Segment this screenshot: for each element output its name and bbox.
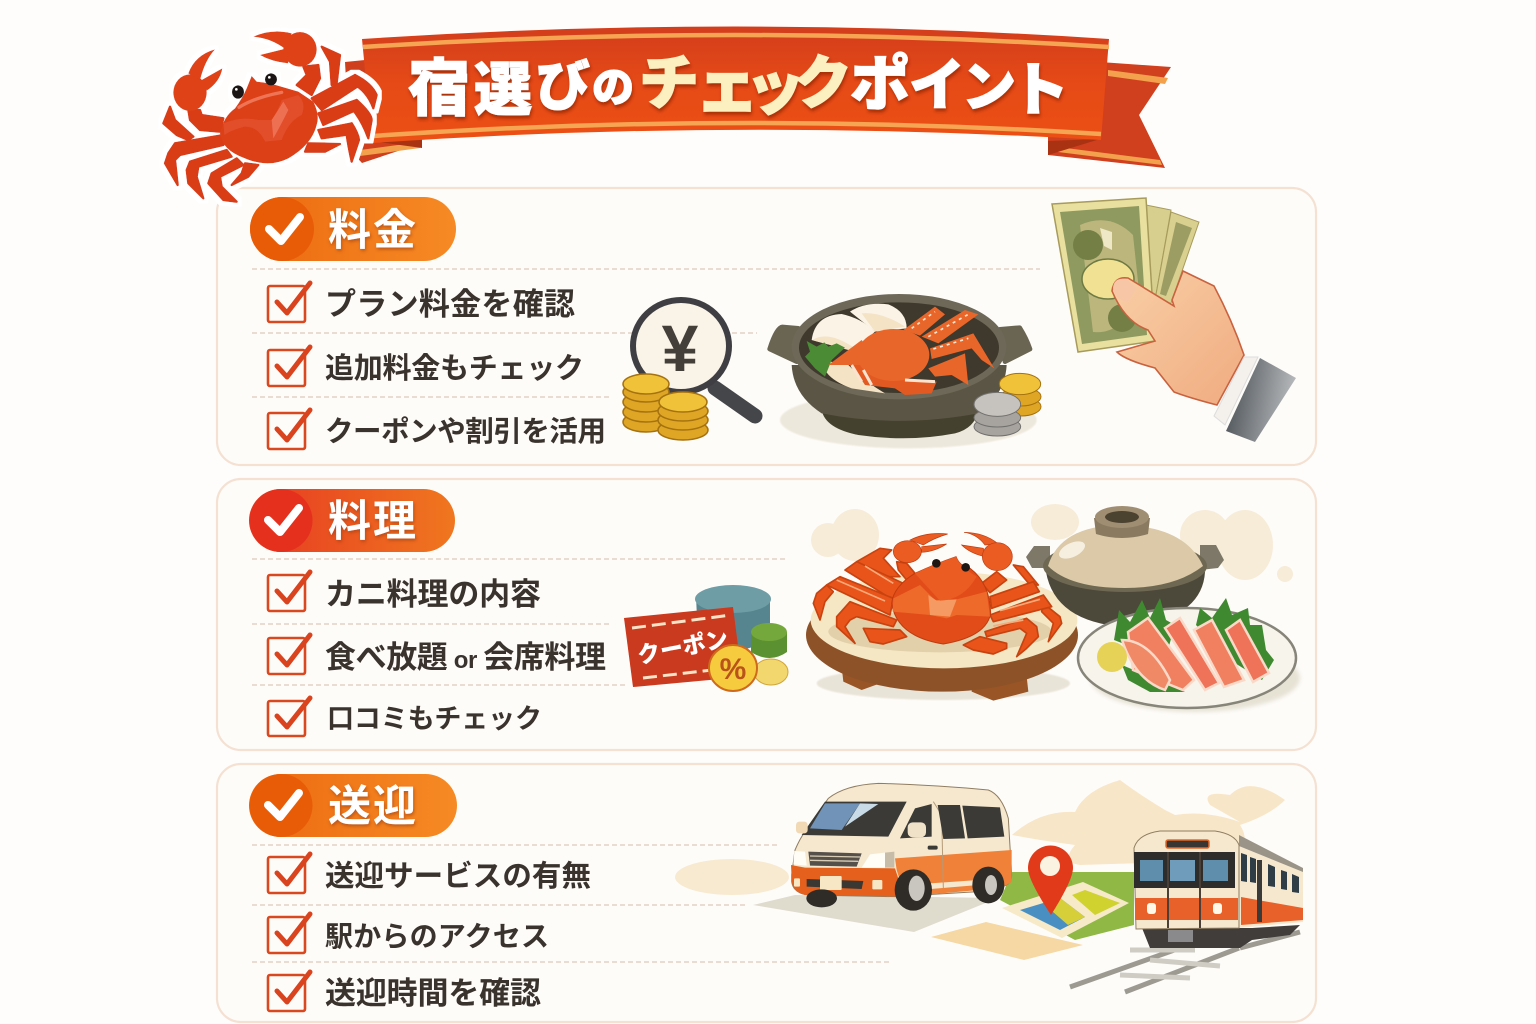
sashimi slices — [1122, 618, 1269, 690]
panel: 料金 — [217, 188, 1316, 465]
van cream body — [792, 783, 1012, 897]
illustration: train on tracks — [1070, 831, 1303, 992]
illustration: clay pot — [1026, 506, 1224, 627]
checklist item: 追加料金もチェック — [268, 347, 584, 386]
checklist item: 駅からのアクセス — [268, 914, 549, 953]
title text: イ — [909, 54, 965, 117]
coin stack right — [658, 392, 708, 440]
title text: ク — [794, 51, 852, 116]
title text: チ — [639, 50, 699, 117]
panel: 料理 — [217, 479, 1316, 750]
crab eyes — [232, 85, 244, 99]
headsign — [1166, 840, 1209, 848]
icon: mascot crab — [163, 31, 377, 202]
van orange front — [791, 865, 904, 897]
road shadow — [753, 895, 998, 932]
checklist item: 送迎サービスの有無: 送迎サービスの有無 — [325, 860, 591, 893]
pot foot — [822, 410, 978, 438]
crab body — [892, 557, 991, 644]
percent badge — [709, 645, 757, 691]
shiso leaf — [805, 341, 845, 377]
location pin — [1028, 846, 1073, 915]
pill heading: 送迎 — [249, 774, 457, 837]
crab legs — [813, 548, 1062, 657]
pot body — [792, 365, 1007, 421]
checklist item: 食べ放題 or 会席料理: 食べ放題 or 会席料理 — [325, 640, 606, 675]
title text: び — [536, 57, 590, 117]
illustration: folded map with pin — [1002, 846, 1129, 938]
checklist item: 口コミもチェック — [268, 698, 542, 736]
lid knob — [1094, 518, 1150, 538]
pill heading: 料金 — [250, 197, 456, 261]
van orange side band — [895, 850, 1012, 897]
illustration: steam clouds — [811, 504, 1293, 582]
checklist item: クーポンや割引を活用: クーポンや割引を活用 — [325, 416, 606, 448]
title text: 宿 — [408, 55, 470, 124]
checklist item: 送迎サービスの有無 — [268, 854, 591, 893]
title text: ェ — [695, 51, 759, 123]
map sheet — [1002, 882, 1129, 938]
back banknotes — [1146, 205, 1171, 300]
train front — [1134, 831, 1239, 929]
checklist item: 駅からのアクセス: 駅からのアクセス — [325, 921, 549, 952]
title text: ポ — [850, 51, 910, 118]
title text: ト — [1011, 58, 1069, 123]
crab eyes — [932, 559, 941, 568]
pill heading: 料理: 料理 — [328, 498, 416, 546]
pill heading: 料金: 料金 — [328, 207, 416, 255]
coupon label: クーポン — [635, 625, 730, 669]
illustration: coupon with bowls — [624, 585, 788, 691]
scallops — [850, 304, 907, 332]
grille — [808, 852, 862, 867]
pot lid rim — [1043, 540, 1207, 592]
checklist item: 追加料金もチェック: 追加料金もチェック — [325, 352, 584, 385]
pot handles — [770, 327, 1030, 362]
crab body — [220, 76, 318, 163]
hand — [1112, 271, 1244, 405]
thumbnail — [1113, 279, 1136, 302]
side windows — [900, 804, 1004, 839]
illustration: sashimi plate — [1078, 598, 1300, 712]
yen symbol: ¥ — [662, 311, 699, 385]
ribbon left tail — [345, 60, 422, 163]
lamps — [1147, 903, 1156, 914]
pot rim and interior — [792, 294, 1006, 399]
train side — [1239, 843, 1303, 928]
title text: ン — [962, 58, 1016, 118]
pot lid — [1048, 525, 1203, 588]
mirrors — [908, 822, 926, 837]
pot handles — [1026, 545, 1224, 570]
tracks — [1070, 932, 1300, 992]
crab claws — [893, 532, 1012, 571]
checklist item: カニ料理の内容: カニ料理の内容 — [325, 577, 541, 612]
checklist item: 送迎時間を確認: 送迎時間を確認 — [325, 976, 541, 1011]
front banknote — [1052, 198, 1155, 352]
board feet — [842, 667, 882, 690]
percent badge: % — [720, 653, 746, 686]
front windows — [1134, 852, 1235, 888]
teal bowl — [696, 596, 770, 650]
wheels — [806, 889, 837, 907]
checklist item: 口コミもチェック: 口コミもチェック — [327, 704, 542, 734]
bumper — [807, 879, 863, 889]
side windows — [1241, 853, 1299, 893]
title text: の — [592, 64, 634, 111]
leg highlights — [837, 566, 1040, 626]
jacket sleeve — [1226, 358, 1296, 442]
title ribbon — [345, 26, 1171, 168]
ribbon main band — [362, 26, 1109, 143]
shiso leaves — [1114, 598, 1175, 660]
ribbon right tail — [1048, 62, 1171, 168]
coin stack left — [623, 374, 669, 432]
ribbon stripes — [363, 35, 1109, 136]
silver coins — [974, 392, 1021, 436]
pill heading: 料理 — [249, 489, 455, 552]
illustration: yen magnifier with coins — [623, 300, 755, 440]
title text: ッ — [745, 55, 805, 122]
crab in pot — [828, 307, 994, 395]
checklist item: クーポンや割引を活用 — [268, 410, 606, 449]
gold coins — [999, 373, 1041, 416]
pale coin — [754, 659, 788, 685]
illustration: shuttle van — [791, 783, 1012, 911]
door seam — [933, 802, 943, 888]
shirt cuff — [1214, 357, 1258, 425]
checklist item: カニ料理の内容 — [268, 572, 541, 612]
panel: 送迎 — [217, 764, 1316, 1022]
checklist item: プラン料金を確認: プラン料金を確認 — [325, 287, 575, 322]
door handle — [928, 846, 938, 850]
illustration: peach clouds and ground — [675, 780, 1285, 960]
title text: 選 — [474, 58, 532, 123]
cream stripe — [930, 880, 978, 889]
magnifier handle — [715, 388, 755, 416]
plate top — [811, 572, 1077, 668]
pot base — [1046, 572, 1205, 627]
right claw — [253, 31, 317, 67]
magnifier lens — [633, 300, 729, 392]
coupon ticket — [624, 607, 742, 687]
illustration: hand holding banknotes — [1052, 198, 1296, 442]
pill heading: 送迎: 送迎 — [328, 783, 416, 831]
sandy map ground — [931, 922, 1083, 960]
headlights — [793, 851, 885, 868]
illustration: stone pot with crab — [770, 294, 1041, 448]
left claw — [173, 49, 222, 111]
board edge — [806, 578, 1078, 692]
windshield — [802, 802, 907, 837]
green ground — [1000, 872, 1134, 940]
plate — [1078, 608, 1296, 708]
illustration: crab on wooden board — [806, 532, 1078, 701]
train underframe — [1142, 925, 1300, 948]
green cup — [751, 632, 787, 658]
lemon — [1097, 642, 1127, 672]
front orange band — [1135, 898, 1238, 920]
